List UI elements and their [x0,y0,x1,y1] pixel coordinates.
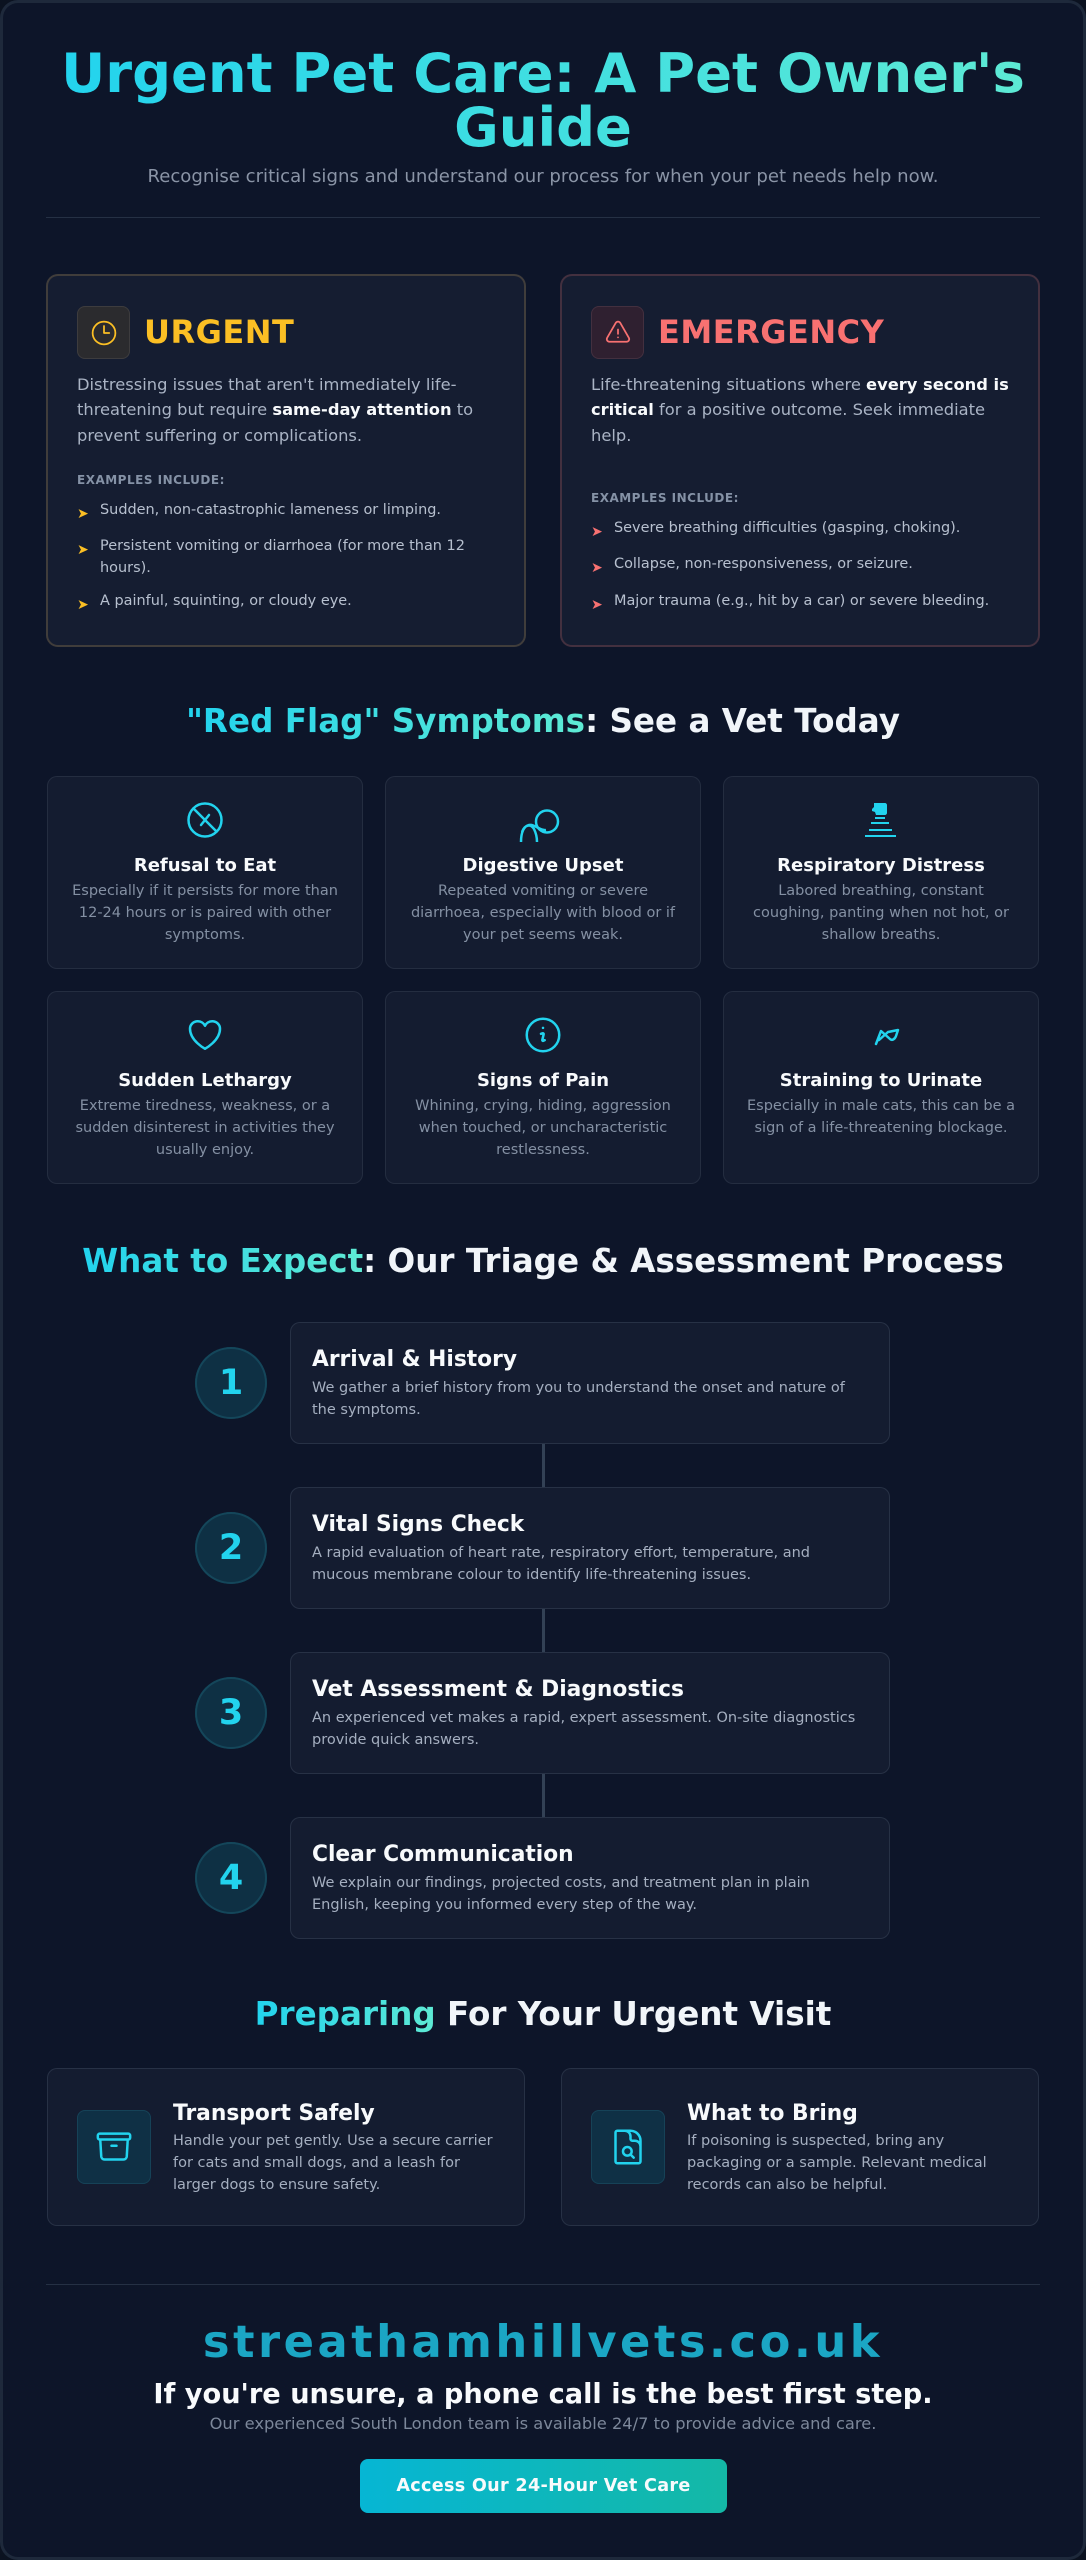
step 3 number: 3 [219,1693,243,1733]
symptom description: when touched, or uncharacteristic [419,1120,667,1136]
emergency examples list: Severe breathing difficulties (gasping, choking). [614,520,960,536]
heading: what to expect: What to Expect: Our Triage & Assessment Process [82,1242,1004,1280]
symptom description: Labored breathing, constant [778,883,984,899]
icon: clock [77,306,130,359]
symptom description: sudden disinterest in activities they [75,1120,335,1136]
step description: provide quick answers. [312,1732,479,1748]
symptom description: Especially if it persists for more than [72,883,338,899]
panel: refusal to eat [47,776,363,969]
card title: What to Bring [687,2101,858,2126]
panel: what to bring [561,2068,1039,2226]
step description: An experienced vet makes a rapid, expert assessment. On-site diagnostics [312,1710,855,1726]
symptom description: diarrhoea, especially with blood or if [411,905,675,921]
step description: English, keeping you informed every step of the way. [312,1897,697,1913]
step description: mucous membrane colour to identify life-threatening issues. [312,1567,751,1583]
panel: digestive upset [385,776,701,969]
emergency examples list [591,520,989,613]
symptom description: sign of a life-threatening blockage. [754,1120,1007,1136]
step description: We gather a brief history from you to understand the onset and nature of [312,1380,845,1396]
symptom description: usually enjoy. [156,1142,254,1158]
panel: transport safely [47,2068,525,2226]
step title: Arrival & History [312,1347,517,1372]
emergency description: help. [591,426,631,445]
symptom title: Sudden Lethargy [118,1070,292,1091]
heading: red flag symptoms: "Red Flag" Symptoms: See a Vet Today [186,702,900,740]
step description: the symptoms. [312,1402,421,1418]
symptom description: Extreme tiredness, weakness, or a [80,1098,330,1114]
symptom description [753,883,1009,943]
card description [173,2133,493,2193]
symptom description [75,1098,335,1158]
panel: straining to urinate [723,991,1039,1184]
symptom description [72,883,338,943]
emergency examples label: EXAMPLES INCLUDE: [591,491,739,505]
card description: for cats and small dogs, and a leash for [173,2155,460,2171]
card title: Transport Safely [173,2101,375,2126]
card description [687,2133,987,2193]
step 4: clear communication [290,1817,890,1939]
symptom title: Straining to Urinate [780,1070,982,1091]
step title: Vital Signs Check [312,1512,524,1537]
emergency examples list: ➤ [591,597,603,613]
step description: A rapid evaluation of heart rate, respiratory effort, temperature, and [312,1545,810,1561]
card description: If poisoning is suspected, bring any [687,2133,944,2149]
symptom description [411,883,676,943]
symptom description: Repeated vomiting or severe [438,883,648,899]
symptom title: Respiratory Distress [777,855,985,876]
symptom description: Especially in male cats, this can be a [747,1098,1015,1114]
urgent examples list: Persistent vomiting or diarrhoea (for more than 12 [100,538,465,554]
symptom description: shallow breaths. [822,927,940,943]
call to action subtext: Our experienced South London team is available 24/7 to provide advice and care. [210,2414,876,2433]
symptom description: symptoms. [165,927,245,943]
icon: refusal [187,802,223,838]
subtitle: Recognise critical signs and understand our process for when your pet needs help now. [147,166,939,187]
icon: warning triangle [591,306,644,359]
panel: urgent [46,274,526,647]
card description: larger dogs to ensure safety. [173,2177,380,2193]
symptom description [415,1098,671,1158]
step 4 number: 4 [219,1858,243,1898]
symptom description: Whining, crying, hiding, aggression [415,1098,671,1114]
symptom title: Signs of Pain [477,1070,609,1091]
panel: emergency [560,274,1040,647]
card description: packaging or a sample. Relevant medical [687,2155,987,2171]
heading: preparing: Preparing For Your Urgent Visit [255,1995,831,2033]
emergency description: critical for a positive outcome. Seek immediate [591,400,985,419]
title: Urgent Pet Care: A Pet Owner's [61,42,1025,105]
step title: Vet Assessment & Diagnostics [312,1677,684,1702]
step 1 number [195,1347,267,1419]
urgent examples list: Sudden, non-catastrophic lameness or limping. [100,502,441,518]
panel: sudden lethargy [47,991,363,1184]
urgent examples list [77,502,465,613]
icon: digestive [520,809,560,842]
symptom title: Digestive Upset [463,855,623,876]
urgent examples list: ➤ [77,506,89,522]
icon: document search [591,2110,665,2184]
urgent description: threatening but require same-day attention to [77,400,473,419]
emergency description: Life-threatening situations where every second is [591,375,1009,394]
urgent examples list: hours). [100,560,151,576]
icon: urinate [874,1028,900,1046]
urgent description: prevent suffering or complications. [77,426,362,445]
button: Access Our 24-Hour Vet Care [396,2476,691,2496]
panel: signs of pain [385,991,701,1184]
emergency examples list: ➤ [591,560,603,576]
step title: Clear Communication [312,1842,574,1867]
step 2: vital signs check [290,1487,890,1609]
icon: heart [188,1020,222,1050]
step description: We explain our findings, projected costs, and treatment plan in plain [312,1875,810,1891]
icon: respiratory [865,803,896,837]
emergency description [591,375,1009,445]
urgent examples list: A painful, squinting, or cloudy eye. [100,593,352,609]
emergency examples list: Major trauma (e.g., hit by a car) or severe bleeding. [614,593,989,609]
icon: info [526,1018,560,1052]
call to action heading: If you're unsure, a phone call is the best first step. [153,2379,933,2410]
urgent description [77,375,473,445]
symptom description: your pet seems weak. [463,927,623,943]
step description [312,1380,846,1418]
urgent examples list: ➤ [77,542,89,558]
step 2 number: 2 [219,1528,243,1568]
title: Guide [454,96,632,159]
icon: archive box [77,2110,151,2184]
symptom description: restlessness. [496,1142,590,1158]
step 4 number [195,1842,267,1914]
step 1 number: 1 [219,1363,243,1403]
card description: records can also be helpful. [687,2177,887,2193]
title [46,47,1040,155]
symptom title: Refusal to Eat [134,855,276,876]
heading: emergency: EMERGENCY [658,313,884,351]
emergency examples list: Collapse, non-responsiveness, or seizure. [614,556,913,572]
urgent description: Distressing issues that aren't immediately life- [77,375,457,394]
website address: streathamhillvets.co.uk [203,2315,883,2368]
urgent examples label: EXAMPLES INCLUDE: [77,473,225,487]
emergency examples list: ➤ [591,524,603,540]
symptom description [747,1098,1015,1136]
symptom description: 12-24 hours or is paired with other [79,905,331,921]
card description: Handle your pet gently. Use a secure carrier [173,2133,493,2149]
button [360,2459,727,2513]
step 1: arrival and history [290,1322,890,1444]
step description [312,1875,810,1913]
heading: urgent: URGENT [144,313,294,351]
step 2 number [195,1512,267,1584]
step 3 number [195,1677,267,1749]
symptom description: coughing, panting when not hot, or [753,905,1009,921]
panel: respiratory distress [723,776,1039,969]
step description [312,1710,855,1748]
step 3: vet assessment [290,1652,890,1774]
step description [312,1545,810,1583]
urgent examples list: ➤ [77,597,89,613]
